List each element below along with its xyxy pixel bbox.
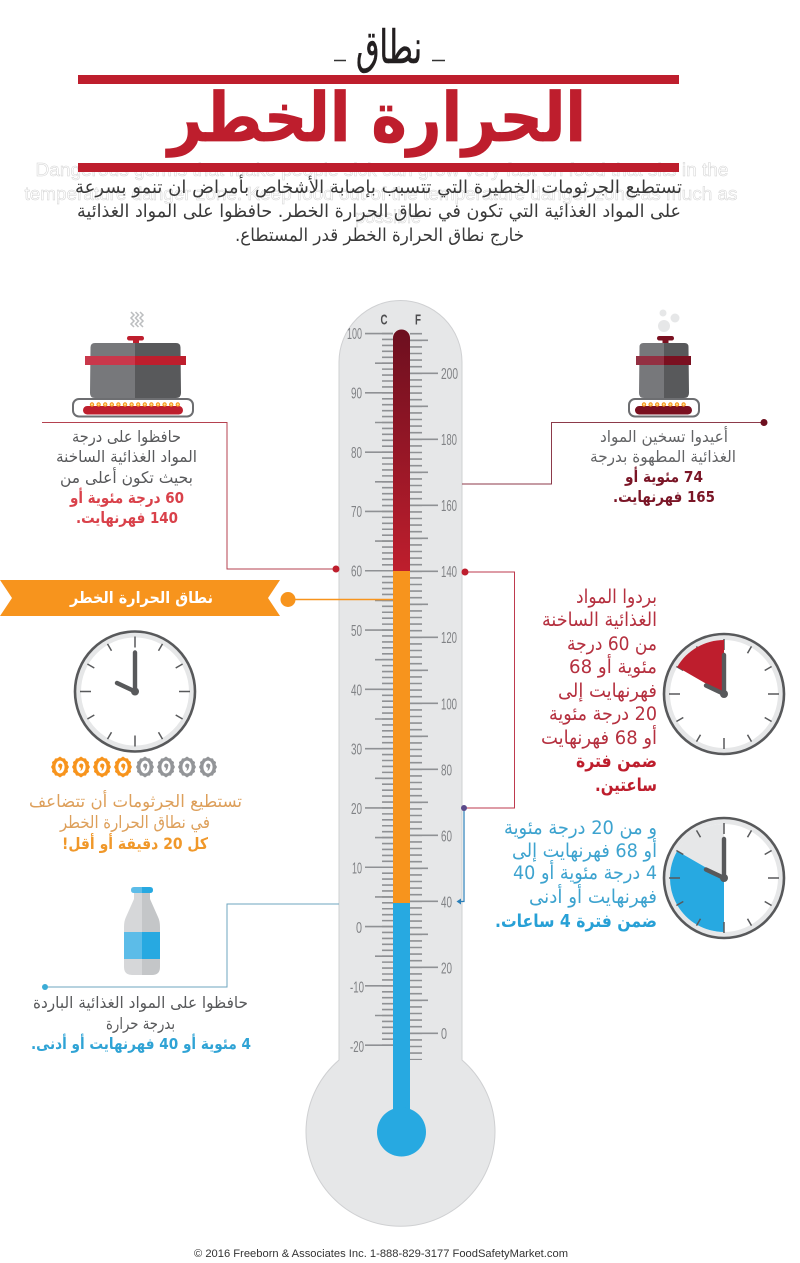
text: cool from 60C to 20C: أو 68 فهرنهايت: [541, 725, 657, 749]
panel: keep cold food cold: [31, 887, 339, 1053]
text: cool from 60C to 20C: بردوا المواد: [576, 586, 657, 608]
text: germs double every 20 minutes: كل 20 دقيقة أو أقل!: [62, 833, 209, 853]
ghost english intro text: [24, 159, 737, 227]
fahrenheit labels: 100: [441, 696, 457, 714]
scale headings C and F: F: [415, 312, 421, 328]
celsius labels: 20: [351, 801, 362, 818]
fahrenheit labels: 200: [441, 366, 458, 383]
connector: cold food to 4C: [42, 904, 339, 990]
title: top rule: [78, 75, 679, 84]
connectors: cooling stages: [456, 568, 514, 904]
intro paragraph: على المواد الغذائية التي تكون في نطاق الحرارة الخطر. حافظوا على المواد الغذائية: [77, 201, 681, 222]
celsius labels: 80: [351, 445, 362, 462]
title: small word: نطاق: [356, 20, 422, 74]
ghost english intro text: temperature danger zone. Keep food out of the temperature danger zone as much as: [24, 183, 737, 204]
text: cool from 60C to 20C: 20 درجة مئوية: [549, 703, 657, 725]
scale headings C and F: C: [380, 312, 388, 328]
celsius labels: -10: [350, 980, 364, 996]
celsius labels: 40: [351, 682, 362, 700]
celsius labels: 50: [351, 623, 362, 640]
fahrenheit labels: 0: [441, 1026, 447, 1043]
text: keep hot food above 60C: حافظوا على درجة: [72, 427, 181, 447]
mercury column: cold range and bulb: [377, 903, 426, 1156]
connector: hot food to 60C: [42, 422, 340, 572]
text: cool from 20C to 4C: و من 20 درجة مئوية: [504, 817, 657, 839]
text: cool from 60C to 20C: الغذائية الساخنة: [542, 609, 657, 631]
panel: germs double: [29, 632, 242, 853]
celsius labels: [347, 326, 364, 1056]
text: cool from 20C to 4C: 4 درجة مئوية أو 40: [513, 860, 657, 884]
scale headings C and F: [380, 312, 421, 328]
fahrenheit labels: 40: [441, 894, 452, 912]
thermometer: [306, 301, 495, 1226]
text: keep hot food above 60C: 140 فهرنهايت.: [76, 509, 178, 527]
banner: temperature danger zone: نطاق الحرارة الخطر: [69, 588, 213, 607]
fahrenheit labels: 20: [441, 960, 452, 978]
mercury column: hot range: [393, 330, 410, 571]
thermometer body: [306, 301, 495, 1226]
text: reheat to 74C: [590, 426, 736, 506]
text: cool from 60C to 20C: ساعتين.: [595, 775, 657, 796]
text: keep cold food at 4C: حافظوا على المواد الغذائية الباردة: [33, 993, 248, 1013]
mercury column: danger zone: [393, 571, 410, 903]
footer: © 2016 Freeborn & Associates Inc. 1-888-829-3177 FoodSafetyMarket.com: [194, 1248, 568, 1260]
connector: reheat to 74C: [462, 419, 768, 484]
fahrenheit labels: 120: [441, 630, 457, 647]
icon: clock 4 o'clock style: [75, 632, 195, 752]
text: reheat to 74C: الغذائية المطهوة بدرجة: [590, 447, 736, 467]
intro paragraph: [75, 174, 682, 246]
text: keep cold food at 4C: بدرجة حرارة: [106, 1014, 175, 1034]
text: cool from 60C to 20C: من 60 درجة: [567, 633, 657, 655]
icon: clock with blue four hour wedge: [664, 818, 784, 938]
fahrenheit labels: 80: [441, 762, 452, 780]
text: cool from 20C to 4C: ضمن فترة 4 ساعات.: [495, 911, 657, 932]
celsius labels: 10: [352, 860, 362, 878]
ghost english intro text: Dangerous germs that make people sick can grow very fast on food that sits in the: [36, 159, 728, 180]
ghost english intro text: possible: [355, 206, 421, 227]
title: [78, 20, 679, 172]
text: reheat to 74C: 165 فهرنهايت.: [613, 488, 715, 506]
celsius labels: -20: [350, 1039, 364, 1056]
icon: clock with red two hour wedge: [664, 634, 784, 754]
icon: pot with steam: [629, 310, 699, 416]
banner: temperature danger zone: [0, 580, 393, 616]
text: keep hot food above 60C: بحيث تكون أعلى من: [60, 467, 193, 488]
title: bottom rule: [78, 163, 679, 172]
panel: cool within two hours: [541, 586, 784, 796]
fahrenheit labels: 180: [441, 432, 457, 449]
fahrenheit labels: 140: [441, 564, 457, 581]
panel: reheat food: [462, 310, 768, 506]
text: cool from 60C to 20C: مئوية أو 68: [569, 654, 657, 678]
text: germs double every 20 minutes: في نطاق الحرارة الخطر: [59, 813, 210, 833]
icon row: germs: [51, 756, 217, 778]
celsius labels: 0: [356, 920, 362, 937]
fahrenheit labels: 60: [441, 828, 452, 846]
panel: keep hot food hot: [42, 312, 340, 572]
celsius labels: 70: [351, 504, 362, 521]
celsius labels: 90: [351, 386, 362, 402]
text: cool from 20C to 4C: أو 68 فهرنهايت إلى: [512, 838, 657, 863]
text: cool from 60C to 20C: فهرنهايت إلى: [558, 680, 657, 703]
text: cool from 60C to 20C: ضمن فترة: [576, 751, 657, 772]
panel: cool within four hours: [495, 817, 784, 938]
text: cool from 60C to 20C: [541, 586, 657, 796]
text: reheat to 74C: أعيدوا تسخين المواد: [600, 426, 728, 447]
text: cool from 20C to 4C: [495, 817, 657, 932]
text: germs double every 20 minutes: تستطيع الجرثومات أن تتضاعف: [29, 790, 242, 812]
intro paragraph: خارج نطاق الحرارة الخطر قدر المستطاع.: [235, 225, 524, 246]
text: keep cold food at 4C: [31, 993, 251, 1053]
icon: steaming pot: [73, 312, 193, 416]
text: keep hot food above 60C: المواد الغذائية الساخنة: [56, 447, 197, 467]
celsius labels: 100: [347, 326, 362, 343]
text: germs double every 20 minutes: [29, 790, 242, 853]
celsius labels: 60: [351, 564, 362, 580]
fahrenheit labels: [441, 366, 458, 1043]
text: keep hot food above 60C: [56, 427, 197, 527]
text: cool from 20C to 4C: فهرنهايت أو أدنى: [529, 884, 657, 908]
fahrenheit scale ticks: [416, 333, 424, 1060]
celsius scale ticks: [379, 333, 388, 1047]
celsius labels: 30: [351, 742, 362, 758]
title: main heading: الحرارة الخطر: [165, 79, 586, 158]
intro paragraph: تستطيع الجرثومات الخطيرة التي تتسبب بإصابة الأشخاص بأمراض ان تنمو بسرعة: [75, 174, 682, 198]
text: keep cold food at 4C: 4 مئوية أو 40 فهرنهايت أو أدنى.: [31, 1034, 251, 1053]
icon: milk bottle: [124, 887, 160, 975]
fahrenheit labels: 160: [441, 498, 457, 515]
text: keep hot food above 60C: 60 درجة مئوية أو: [69, 488, 184, 507]
text: reheat to 74C: 74 مئوية أو: [624, 467, 703, 486]
